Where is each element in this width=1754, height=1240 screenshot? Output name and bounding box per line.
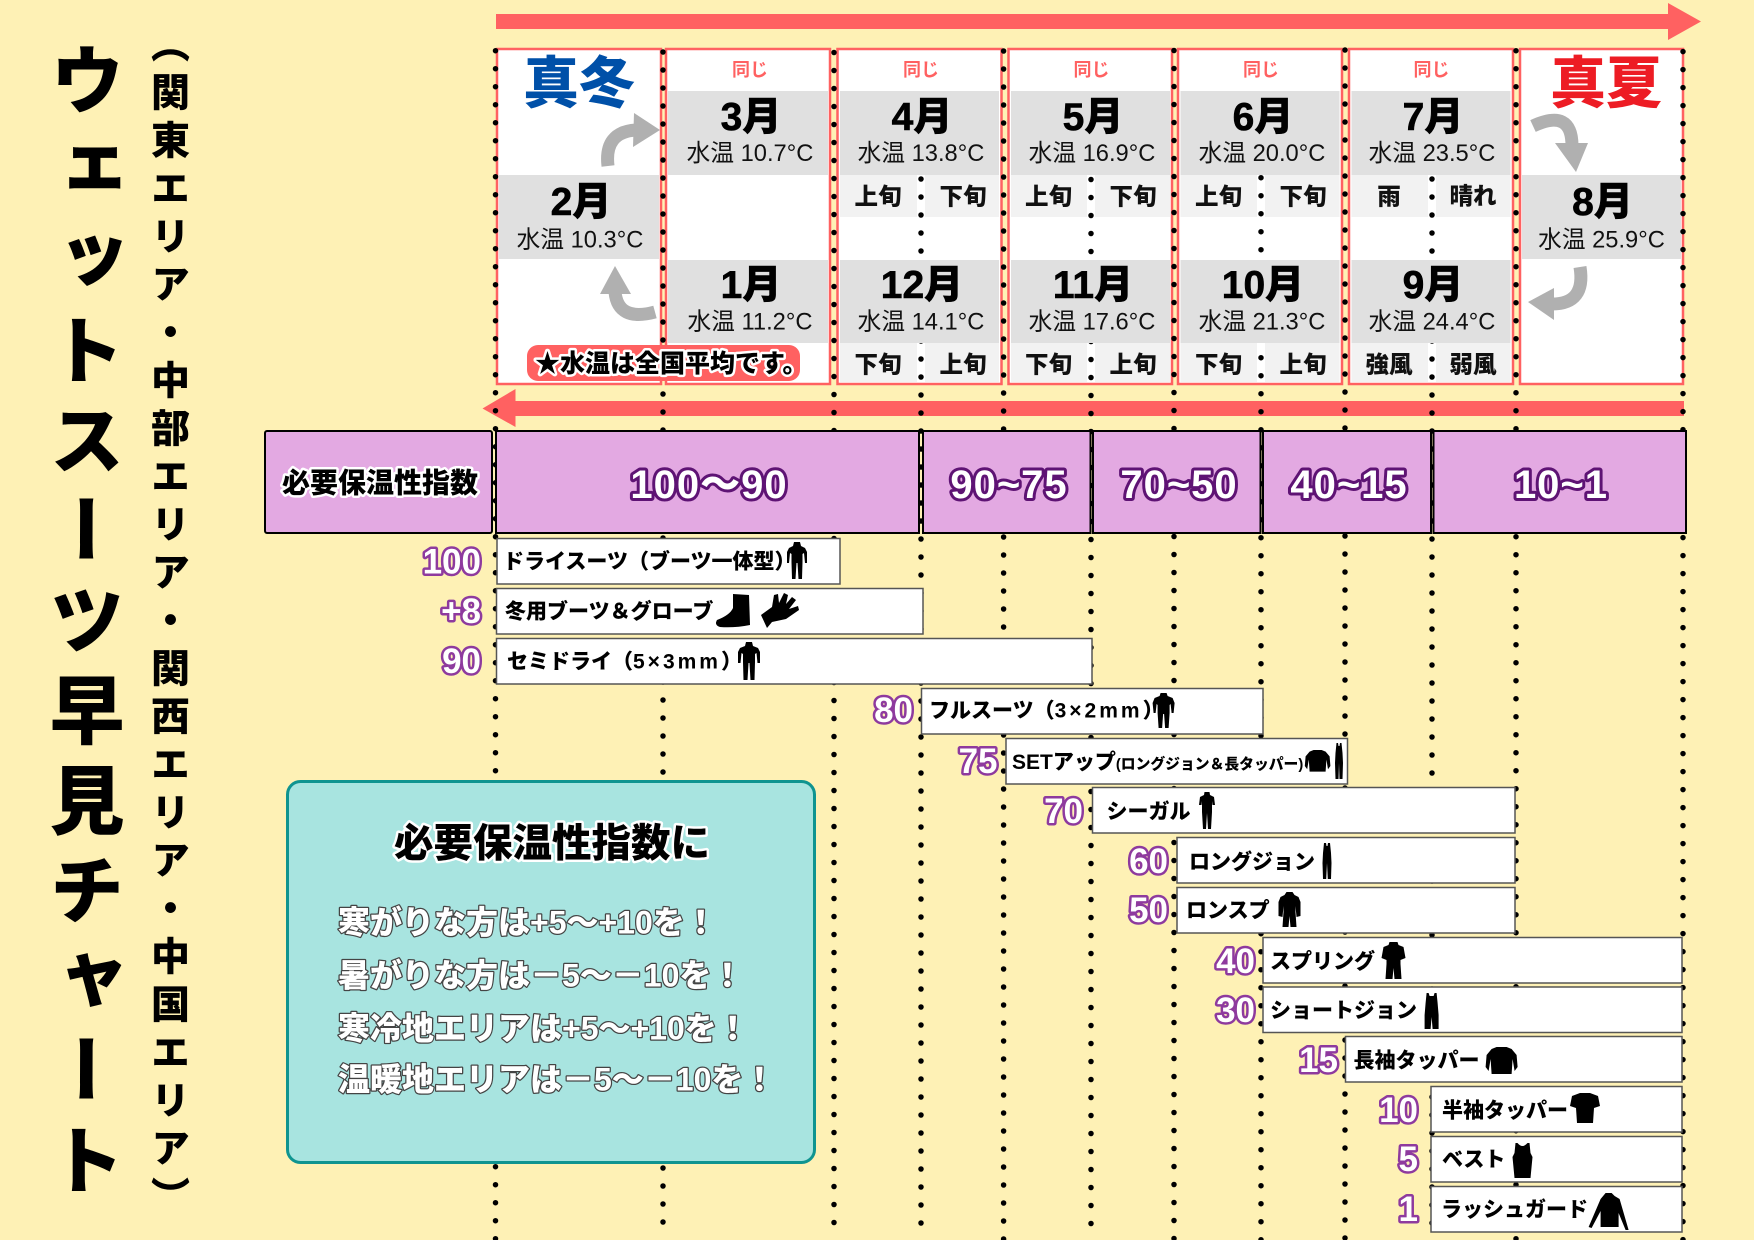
icon: glove xyxy=(761,593,799,628)
row: rash guard, index 1: ラッシュガード xyxy=(1441,1198,1588,1222)
row: sea gull, index 70: 70 xyxy=(1044,792,1083,831)
advice lines: 寒がりな方は+5～+10を！ xyxy=(338,904,717,940)
advice lines: 寒冷地エリアは+5～+10を！ xyxy=(338,1010,749,1046)
set-up label: SETアップ(ロングジョン＆長タッパー) xyxy=(1012,751,1303,774)
subtitle: target areas: （関東エリア・中部エリア・関西エリア・中国エリア） xyxy=(146,24,190,1224)
icon: short john xyxy=(1425,993,1439,1029)
row: sea gull, index 70 xyxy=(1044,788,1515,833)
row: set-up, index 75: 75 xyxy=(959,742,998,781)
month: January: 1月 xyxy=(721,264,781,307)
month: September: 水温 24.4°C xyxy=(1369,308,1495,336)
month: July: 7月 xyxy=(1403,96,1463,139)
month: January xyxy=(688,264,812,336)
period labels: 下旬 xyxy=(940,184,986,210)
row: short tapper, index 10: 10 xyxy=(1379,1091,1418,1130)
row: vest, index 5: ベスト xyxy=(1442,1148,1505,1172)
icon: long tapper xyxy=(1486,1047,1518,1074)
note: same: 同じ xyxy=(1243,60,1279,80)
row: rash guard, index 1 xyxy=(1399,1186,1682,1232)
row: long-sleeve spring, index 50 xyxy=(1129,888,1515,933)
panel: April and December xyxy=(838,49,1002,384)
arrow: falling season, bottom xyxy=(482,389,1684,427)
row: long john, index 60: ロングジョン xyxy=(1189,850,1315,874)
period labels xyxy=(1195,184,1326,378)
month: July: 水温 23.5°C xyxy=(1369,140,1495,167)
month: June: 水温 20.0°C xyxy=(1199,140,1325,167)
period labels: 上旬 xyxy=(854,184,902,210)
month: March: 水温 10.7°C xyxy=(687,140,813,167)
month: June xyxy=(1199,96,1325,167)
row: long-sleeve spring, index 50: ロンスプ xyxy=(1186,900,1270,922)
weather labels xyxy=(1366,183,1497,378)
row: winter boots and gloves, plus 8: 冬用ブーツ＆グローブ xyxy=(505,600,713,624)
period labels: 上旬 xyxy=(1025,184,1072,210)
arrow: August to September xyxy=(1528,267,1581,320)
index ranges: 90~75 xyxy=(950,463,1068,507)
month: July xyxy=(1369,96,1495,167)
weather labels: 晴れ xyxy=(1450,183,1496,209)
row: spring, index 40: スプリング xyxy=(1270,950,1375,974)
period labels xyxy=(854,184,986,378)
advice lines: 温暖地エリアは－5～－10を！ xyxy=(338,1062,775,1098)
month: May: 水温 16.9°C xyxy=(1029,140,1155,167)
row: winter boots and gloves, plus 8 xyxy=(441,588,923,634)
month: November xyxy=(1029,264,1155,336)
row: full suit, index 80 xyxy=(874,688,1263,734)
advice heading: 必要保温性指数に xyxy=(394,822,710,866)
month: June: 6月 xyxy=(1233,96,1293,139)
row: long tapper, index 15: 15 xyxy=(1299,1041,1338,1080)
icon: long-sleeve spring suit xyxy=(1278,892,1300,927)
month: April: 水温 13.8°C xyxy=(858,140,984,167)
arrow: February to March xyxy=(608,113,660,166)
index heading: 必要保温性指数 xyxy=(282,468,478,498)
row: vest, index 5 xyxy=(1399,1136,1682,1182)
period labels: 下旬 xyxy=(1195,352,1242,378)
row: short tapper, index 10: 半袖タッパー xyxy=(1442,1100,1568,1122)
row: long tapper, index 15: 長袖タッパー xyxy=(1354,1050,1480,1072)
period labels: 上旬 xyxy=(940,352,986,378)
note: same: 同じ xyxy=(1074,60,1110,80)
row: semi-dry, index 90: セミドライ（5×3mm） xyxy=(507,650,742,674)
row: sea gull, index 70: シーガル xyxy=(1106,800,1190,824)
month: September xyxy=(1369,264,1495,336)
month: April xyxy=(858,96,984,167)
row: set-up, index 75 xyxy=(959,738,1348,784)
header: required warmth index bar xyxy=(265,431,1686,533)
index ranges: 70~50 xyxy=(1120,463,1238,507)
month: March xyxy=(687,96,813,167)
note: same: 同じ xyxy=(732,60,768,80)
row: semi-dry, index 90: 90 xyxy=(442,642,481,681)
row: dry suit, index 100: ドライスーツ（ブーツ一体型） xyxy=(503,550,796,574)
row: spring, index 40: 40 xyxy=(1216,942,1255,981)
month: February: 2月 xyxy=(551,181,611,224)
arrow: January to February xyxy=(600,266,655,314)
month: January: 水温 11.2°C xyxy=(688,308,812,336)
period labels: 下旬 xyxy=(1025,352,1072,378)
month: October: 水温 21.3°C xyxy=(1199,308,1325,336)
arrow: July to August xyxy=(1533,120,1588,172)
title: ウェットスーツ早見チャート xyxy=(38,42,123,1212)
row: long john, index 60: 60 xyxy=(1129,842,1168,881)
period labels: 上旬 xyxy=(1110,352,1156,378)
row: short tapper, index 10 xyxy=(1379,1086,1682,1132)
advice lines: 暑がりな方は－5～－10を！ xyxy=(338,958,743,994)
month: March: 3月 xyxy=(721,96,781,139)
panel: July and September xyxy=(1349,49,1513,384)
callout: water temperature note: ★水温は全国平均です。 xyxy=(535,350,808,378)
month: August xyxy=(1538,181,1665,254)
row: dry suit, index 100 xyxy=(423,538,840,584)
row: long tapper, index 15 xyxy=(1299,1036,1682,1082)
period labels: 上旬 xyxy=(1280,352,1326,378)
index ranges: 40~15 xyxy=(1290,463,1408,507)
month: February: 水温 10.3°C xyxy=(517,226,643,254)
note: same: 同じ xyxy=(903,60,939,80)
row: rash guard, index 1: 1 xyxy=(1399,1190,1418,1229)
period labels: 下旬 xyxy=(1110,184,1156,210)
icon: vest xyxy=(1512,1143,1532,1178)
icon: spring suit xyxy=(1382,942,1406,979)
index ranges: 10~1 xyxy=(1514,463,1608,507)
arrow: rising season, top xyxy=(496,3,1701,40)
month: October xyxy=(1199,264,1325,336)
panel: March and January xyxy=(666,49,830,384)
weather labels: 雨 xyxy=(1377,184,1401,210)
row: long-sleeve spring, index 50: 50 xyxy=(1129,891,1168,930)
row: winter boots and gloves, plus 8: +8 xyxy=(441,592,481,631)
row: short john, index 30 xyxy=(1216,987,1682,1032)
month: November: 水温 17.6°C xyxy=(1029,308,1155,336)
period labels: 下旬 xyxy=(1280,184,1326,210)
index ranges: 100～90 xyxy=(630,463,788,507)
label: midsummer: 真夏 xyxy=(1550,52,1662,115)
row: dry suit, index 100: 100 xyxy=(423,542,481,582)
icon: long tapper xyxy=(1305,750,1330,772)
panel: warmth index advice xyxy=(288,782,814,1162)
month: November: 11月 xyxy=(1053,264,1133,307)
index ranges xyxy=(630,463,1608,507)
dotted month guide lines xyxy=(496,50,1683,1240)
month: May xyxy=(1029,96,1155,167)
row: short john, index 30: ショートジョン xyxy=(1270,1000,1417,1022)
period labels xyxy=(1025,184,1156,378)
row: full suit, index 80: 80 xyxy=(874,691,913,730)
row: spring, index 40 xyxy=(1216,938,1682,983)
icon: boot xyxy=(716,594,750,627)
row: long john, index 60 xyxy=(1129,838,1515,883)
icon: short tapper xyxy=(1570,1093,1600,1123)
weather labels: 強風 xyxy=(1366,352,1413,378)
icon: semi-dry suit xyxy=(738,642,760,680)
panel: midsummer xyxy=(1520,49,1683,384)
icon: long john xyxy=(1322,843,1332,879)
icon: rash guard xyxy=(1589,1193,1629,1230)
advice lines xyxy=(338,904,775,1098)
period labels: 上旬 xyxy=(1195,184,1242,210)
icon: full suit xyxy=(1153,693,1175,728)
weather labels: 弱風 xyxy=(1450,352,1497,378)
month: September: 9月 xyxy=(1403,264,1463,307)
row: short john, index 30: 30 xyxy=(1216,991,1255,1030)
icon: dry suit xyxy=(787,542,807,579)
panel: midwinter xyxy=(497,49,661,384)
label: midwinter: 真冬 xyxy=(523,52,635,115)
month: February xyxy=(517,181,643,254)
icon: long john xyxy=(1335,743,1343,779)
row: semi-dry, index 90 xyxy=(442,638,1092,684)
month: May: 5月 xyxy=(1063,96,1123,139)
month: August: 水温 25.9°C xyxy=(1538,226,1665,254)
icon: sea gull suit xyxy=(1199,792,1215,829)
row: full suit, index 80: フルスーツ（3×2mm） xyxy=(929,700,1164,722)
month: December: 水温 14.1°C xyxy=(858,308,984,336)
month: April: 4月 xyxy=(892,96,952,139)
note: same: 同じ xyxy=(1414,60,1450,80)
panel: May and November xyxy=(1008,49,1172,384)
month: December: 12月 xyxy=(881,264,963,307)
row: vest, index 5: 5 xyxy=(1399,1140,1418,1179)
month: December xyxy=(858,264,984,336)
period labels: 下旬 xyxy=(854,352,902,378)
panel: June and October xyxy=(1178,49,1342,384)
month: August: 8月 xyxy=(1572,181,1633,224)
month: October: 10月 xyxy=(1222,264,1304,307)
